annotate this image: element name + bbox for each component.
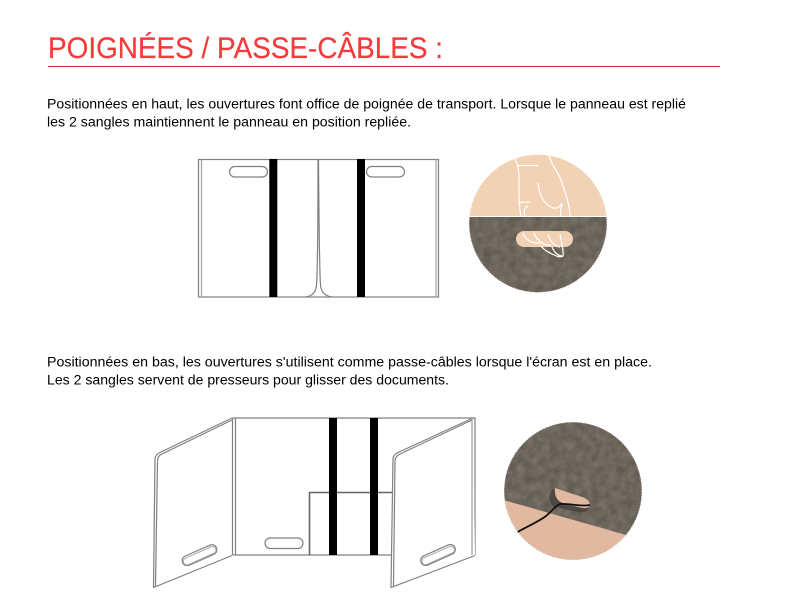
slot opening bbox=[555, 488, 590, 508]
skin upper half bbox=[470, 154, 606, 216]
text block: bottom description: Positionnées en bas, les ouvertures s'utilisent comme passe-câbles lorsque l'écran est en place. bbox=[47, 354, 652, 370]
felt lower half bbox=[469, 217, 607, 292]
text block: bottom description: Les 2 sangles servent de presseurs pour glisser des documents. bbox=[47, 372, 449, 388]
diagram: open three-panel screen with cable slots bbox=[154, 418, 475, 588]
strap left bbox=[269, 159, 277, 297]
icon: right handle slot bbox=[366, 166, 404, 177]
circle: cable through slot detail bbox=[504, 422, 642, 560]
centre panel bbox=[232, 418, 475, 555]
slot shadow bbox=[549, 489, 589, 512]
skin area bbox=[504, 500, 626, 560]
title underline bbox=[48, 66, 720, 67]
handle opening bbox=[516, 231, 573, 247]
cable bbox=[518, 504, 590, 532]
strap right bbox=[370, 418, 378, 555]
circle: hand through handle detail bbox=[469, 154, 607, 292]
left door bbox=[154, 418, 232, 588]
felt background bbox=[504, 422, 642, 560]
centre slot bbox=[265, 538, 303, 548]
hand outline bbox=[514, 156, 570, 257]
title: POIGNÉES / PASSE-CÂBLES : bbox=[48, 32, 443, 65]
right door bbox=[391, 418, 475, 588]
scalloped edge bbox=[504, 422, 642, 560]
screen behind bbox=[310, 492, 392, 555]
icon: left handle slot bbox=[230, 166, 268, 177]
scalloped edge bbox=[469, 154, 607, 292]
strap right bbox=[357, 159, 365, 297]
text block: top description bbox=[47, 96, 686, 130]
text block: top description: Positionnées en haut, les ouvertures font office de poignée de transport. Lorsque le panneau est replié bbox=[47, 96, 686, 112]
text block: top description: les 2 sangles maintiennent le panneau en position repliée. bbox=[47, 114, 411, 130]
diagram: folded panel with top handles bbox=[198, 159, 438, 297]
strap left bbox=[329, 418, 337, 555]
text block: bottom description bbox=[47, 354, 652, 388]
split line bbox=[468, 216, 608, 217]
